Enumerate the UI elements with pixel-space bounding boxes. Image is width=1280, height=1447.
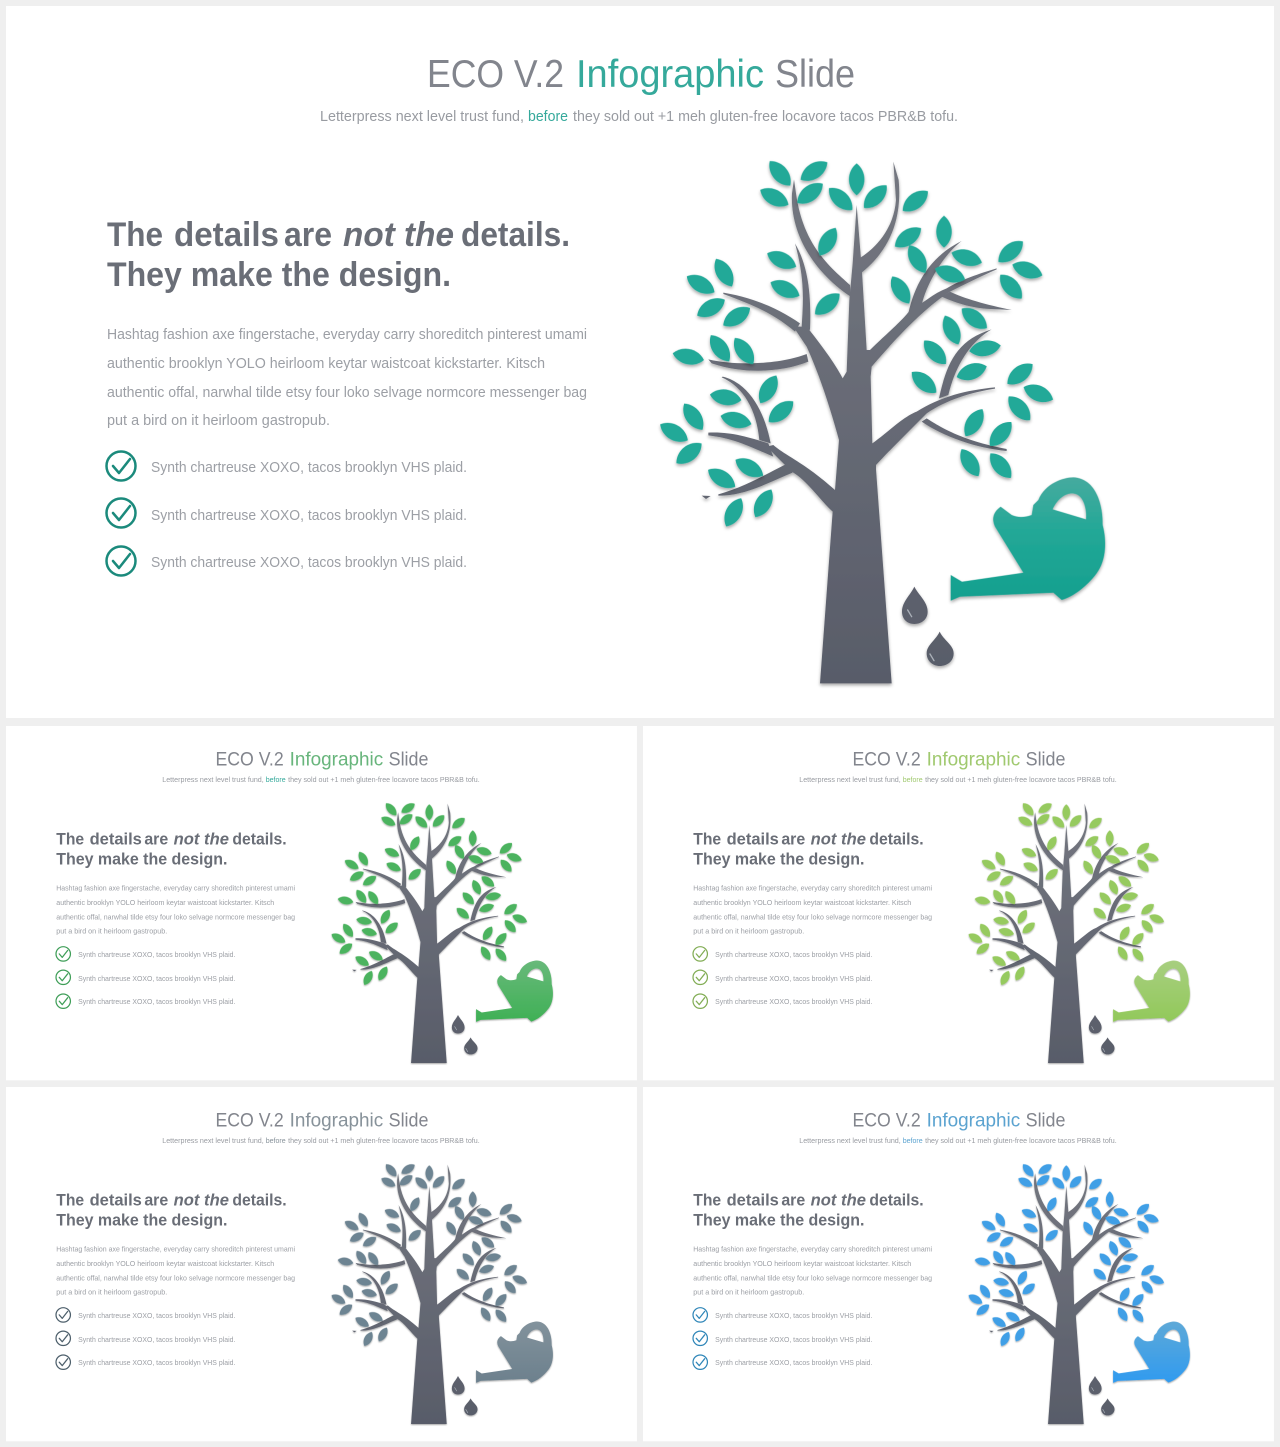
checklist — [693, 1308, 872, 1369]
heading: They make the design. — [693, 1210, 864, 1229]
subtitle — [799, 1136, 1117, 1145]
heading — [693, 829, 924, 868]
paragraph: Hashtag fashion axe fingerstache, everyday carry shoreditch pinterest umami — [56, 1245, 295, 1254]
subtitle: before — [903, 775, 923, 784]
paragraph: Hashtag fashion axe fingerstache, everyday carry shoreditch pinterest umami — [107, 326, 587, 343]
title: Infographic — [290, 1109, 383, 1131]
checklist: Synth chartreuse XOXO, tacos brooklyn VHS plaid. — [78, 1358, 235, 1367]
paragraph: Hashtag fashion axe fingerstache, everyday carry shoreditch pinterest umami — [693, 1245, 932, 1254]
subtitle: Letterpress next level trust fund, — [320, 109, 524, 125]
tree illustration with watering can — [656, 156, 1105, 683]
checklist: Synth chartreuse XOXO, tacos brooklyn VHS plaid. — [78, 974, 235, 983]
panel: blue slide — [643, 1087, 1274, 1441]
heading: The — [107, 216, 163, 254]
panel: main teal slide — [6, 6, 1274, 718]
heading — [107, 216, 570, 294]
paragraph — [56, 884, 295, 935]
paragraph: authentic brooklyn YOLO heirloom keytar waistcoat kickstarter. Kitsch — [56, 1259, 274, 1268]
checklist: Synth chartreuse XOXO, tacos brooklyn VHS plaid. — [78, 997, 235, 1006]
panel: green slide — [6, 726, 637, 1080]
title: Infographic — [290, 748, 383, 770]
checklist: Synth chartreuse XOXO, tacos brooklyn VHS plaid. — [715, 950, 872, 959]
paragraph — [56, 1245, 295, 1296]
paragraph: authentic brooklyn YOLO heirloom keytar waistcoat kickstarter. Kitsch — [693, 1259, 911, 1268]
paragraph: put a bird on it heirloom gastropub. — [56, 926, 167, 935]
paragraph: authentic offal, narwhal tilde etsy four loko selvage normcore messenger bag — [107, 384, 587, 401]
title: ECO V.2 — [215, 748, 284, 770]
checklist — [693, 947, 872, 1008]
heading: details. — [461, 216, 570, 254]
title: Slide — [389, 748, 428, 770]
title: Slide — [389, 1109, 428, 1131]
heading: are — [144, 1190, 168, 1209]
paragraph — [107, 326, 587, 429]
subtitle: they sold out +1 meh gluten-free locavore tacos PBR&B tofu. — [925, 775, 1117, 784]
checklist: Synth chartreuse XOXO, tacos brooklyn VHS plaid. — [78, 1335, 235, 1344]
paragraph: put a bird on it heirloom gastropub. — [56, 1287, 167, 1296]
heading: details. — [232, 1190, 287, 1209]
heading: not the — [811, 1190, 866, 1209]
title: ECO V.2 — [852, 1109, 921, 1131]
title: Infographic — [927, 1109, 1020, 1131]
paragraph: authentic brooklyn YOLO heirloom keytar waistcoat kickstarter. Kitsch — [56, 898, 274, 907]
checklist — [56, 1308, 235, 1369]
subtitle: Letterpress next level trust fund, — [799, 775, 901, 784]
heading: not the — [811, 829, 866, 848]
tree illustration with watering can — [330, 801, 553, 1063]
subtitle: Letterpress next level trust fund, — [162, 775, 264, 784]
subtitle: they sold out +1 meh gluten-free locavore tacos PBR&B tofu. — [288, 1136, 480, 1145]
heading: They make the design. — [56, 849, 227, 868]
checklist: Synth chartreuse XOXO, tacos brooklyn VHS plaid. — [151, 554, 467, 571]
heading: The — [693, 1190, 721, 1209]
heading — [56, 1190, 287, 1229]
tree illustration with watering can — [330, 1162, 553, 1424]
paragraph: put a bird on it heirloom gastropub. — [693, 926, 804, 935]
title — [215, 1109, 428, 1131]
paragraph: authentic brooklyn YOLO heirloom keytar waistcoat kickstarter. Kitsch — [107, 355, 545, 372]
title: ECO V.2 — [852, 748, 921, 770]
heading: not the — [343, 216, 454, 254]
heading: details — [90, 1190, 142, 1209]
checklist — [56, 947, 235, 1008]
paragraph: Hashtag fashion axe fingerstache, everyday carry shoreditch pinterest umami — [56, 884, 295, 893]
title: Infographic — [576, 53, 764, 96]
subtitle — [162, 775, 480, 784]
heading: details — [727, 1190, 779, 1209]
paragraph: authentic brooklyn YOLO heirloom keytar waistcoat kickstarter. Kitsch — [693, 898, 911, 907]
heading: are — [144, 829, 168, 848]
paragraph — [693, 1245, 932, 1296]
heading — [56, 829, 287, 868]
subtitle: they sold out +1 meh gluten-free locavore tacos PBR&B tofu. — [573, 109, 958, 125]
title: Slide — [1026, 748, 1065, 770]
heading: The — [693, 829, 721, 848]
subtitle: Letterpress next level trust fund, — [162, 1136, 264, 1145]
subtitle: before — [266, 1136, 286, 1145]
panel: lime slide — [643, 726, 1274, 1080]
paragraph: authentic offal, narwhal tilde etsy four loko selvage normcore messenger bag — [693, 1274, 932, 1283]
checklist: Synth chartreuse XOXO, tacos brooklyn VHS plaid. — [78, 950, 235, 959]
heading — [693, 1190, 924, 1229]
tree illustration with watering can — [967, 801, 1190, 1063]
title — [215, 748, 428, 770]
heading: are — [781, 1190, 805, 1209]
heading: They make the design. — [693, 849, 864, 868]
paragraph: Hashtag fashion axe fingerstache, everyday carry shoreditch pinterest umami — [693, 884, 932, 893]
paragraph: authentic offal, narwhal tilde etsy four loko selvage normcore messenger bag — [693, 913, 932, 922]
heading: are — [781, 829, 805, 848]
subtitle: Letterpress next level trust fund, — [799, 1136, 901, 1145]
heading: The — [56, 1190, 84, 1209]
subtitle: they sold out +1 meh gluten-free locavore tacos PBR&B tofu. — [288, 775, 480, 784]
paragraph — [693, 884, 932, 935]
paragraph: put a bird on it heirloom gastropub. — [107, 412, 330, 429]
heading: not the — [174, 829, 229, 848]
tree illustration with watering can — [967, 1162, 1190, 1424]
subtitle — [162, 1136, 480, 1145]
checklist — [106, 452, 467, 576]
paragraph: put a bird on it heirloom gastropub. — [693, 1287, 804, 1296]
title — [852, 748, 1065, 770]
subtitle: before — [528, 109, 568, 125]
heading: details — [174, 216, 279, 254]
title — [427, 53, 855, 96]
heading: details — [727, 829, 779, 848]
checklist: Synth chartreuse XOXO, tacos brooklyn VHS plaid. — [715, 1358, 872, 1367]
title: Infographic — [927, 748, 1020, 770]
heading: details — [90, 829, 142, 848]
subtitle: they sold out +1 meh gluten-free locavore tacos PBR&B tofu. — [925, 1136, 1117, 1145]
checklist: Synth chartreuse XOXO, tacos brooklyn VHS plaid. — [715, 1311, 872, 1320]
checklist: Synth chartreuse XOXO, tacos brooklyn VHS plaid. — [78, 1311, 235, 1320]
checklist: Synth chartreuse XOXO, tacos brooklyn VHS plaid. — [715, 1335, 872, 1344]
title: ECO V.2 — [215, 1109, 284, 1131]
title: ECO V.2 — [427, 53, 564, 96]
title — [852, 1109, 1065, 1131]
checklist: Synth chartreuse XOXO, tacos brooklyn VHS plaid. — [151, 459, 467, 476]
heading: are — [284, 216, 332, 254]
title: Slide — [1026, 1109, 1065, 1131]
heading: They make the design. — [56, 1210, 227, 1229]
checklist: Synth chartreuse XOXO, tacos brooklyn VHS plaid. — [715, 974, 872, 983]
subtitle: before — [266, 775, 286, 784]
heading: The — [56, 829, 84, 848]
subtitle — [320, 109, 958, 125]
heading: not the — [174, 1190, 229, 1209]
checklist: Synth chartreuse XOXO, tacos brooklyn VHS plaid. — [715, 997, 872, 1006]
checklist: Synth chartreuse XOXO, tacos brooklyn VHS plaid. — [151, 507, 467, 524]
paragraph: authentic offal, narwhal tilde etsy four loko selvage normcore messenger bag — [56, 913, 295, 922]
paragraph: authentic offal, narwhal tilde etsy four loko selvage normcore messenger bag — [56, 1274, 295, 1283]
heading: details. — [869, 829, 924, 848]
heading: They make the design. — [107, 256, 451, 294]
panel: slate slide — [6, 1087, 637, 1441]
heading: details. — [869, 1190, 924, 1209]
heading: details. — [232, 829, 287, 848]
title: Slide — [775, 53, 855, 96]
subtitle — [799, 775, 1117, 784]
subtitle: before — [903, 1136, 923, 1145]
